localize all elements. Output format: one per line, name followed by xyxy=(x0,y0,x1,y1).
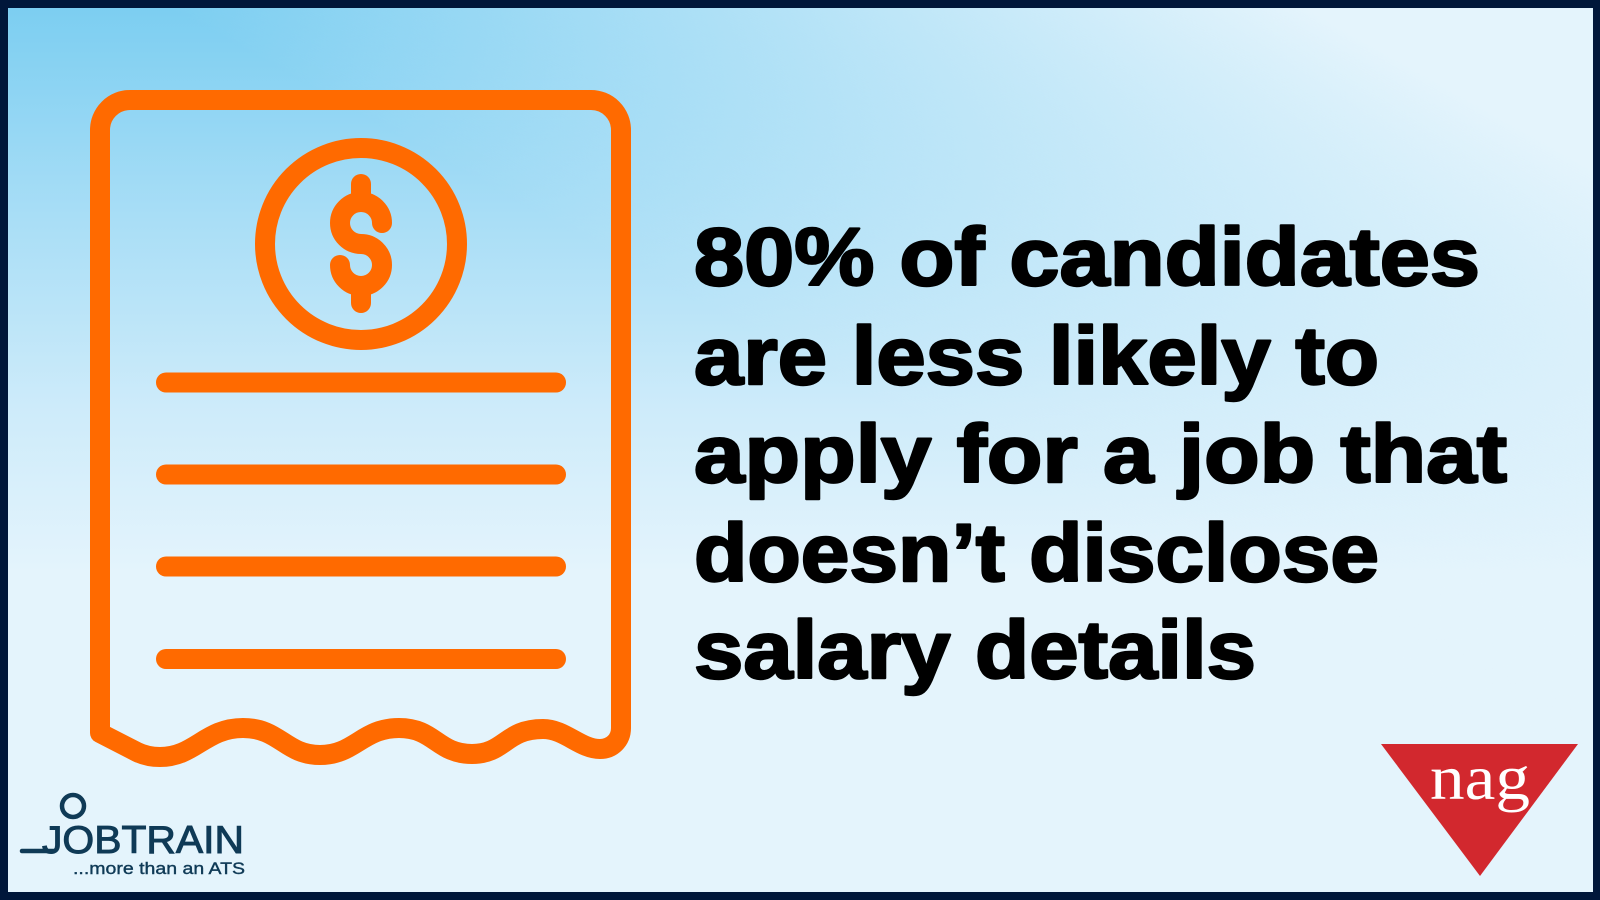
dollar coin circle xyxy=(265,148,457,340)
logo tagline: ...more than an ATS xyxy=(73,859,245,878)
receipt outline xyxy=(100,100,621,757)
dollar sign xyxy=(340,184,382,303)
receipt line 3 xyxy=(166,556,556,576)
headline statistic xyxy=(694,212,1507,696)
headline statistic: salary details xyxy=(694,605,1256,696)
headline statistic: doesn’t disclose xyxy=(694,508,1379,599)
receipt line 1 xyxy=(166,372,556,392)
receipt line 2 xyxy=(166,464,556,484)
red triangle xyxy=(1381,744,1578,876)
logo figure head xyxy=(62,795,84,817)
nag wordmark: nag xyxy=(1430,742,1530,813)
logo J tail xyxy=(22,849,54,853)
headline statistic: apply for a job that xyxy=(694,409,1507,500)
logo wordmark: JOBTRAIN xyxy=(42,819,244,862)
headline statistic: are less likely to xyxy=(694,311,1379,402)
logo: Jobtrain xyxy=(22,795,245,878)
icon: salary receipt xyxy=(100,100,621,757)
logo: nag xyxy=(1381,742,1578,876)
receipt line 4 xyxy=(166,649,556,669)
headline statistic: 80% of candidates xyxy=(694,212,1480,303)
